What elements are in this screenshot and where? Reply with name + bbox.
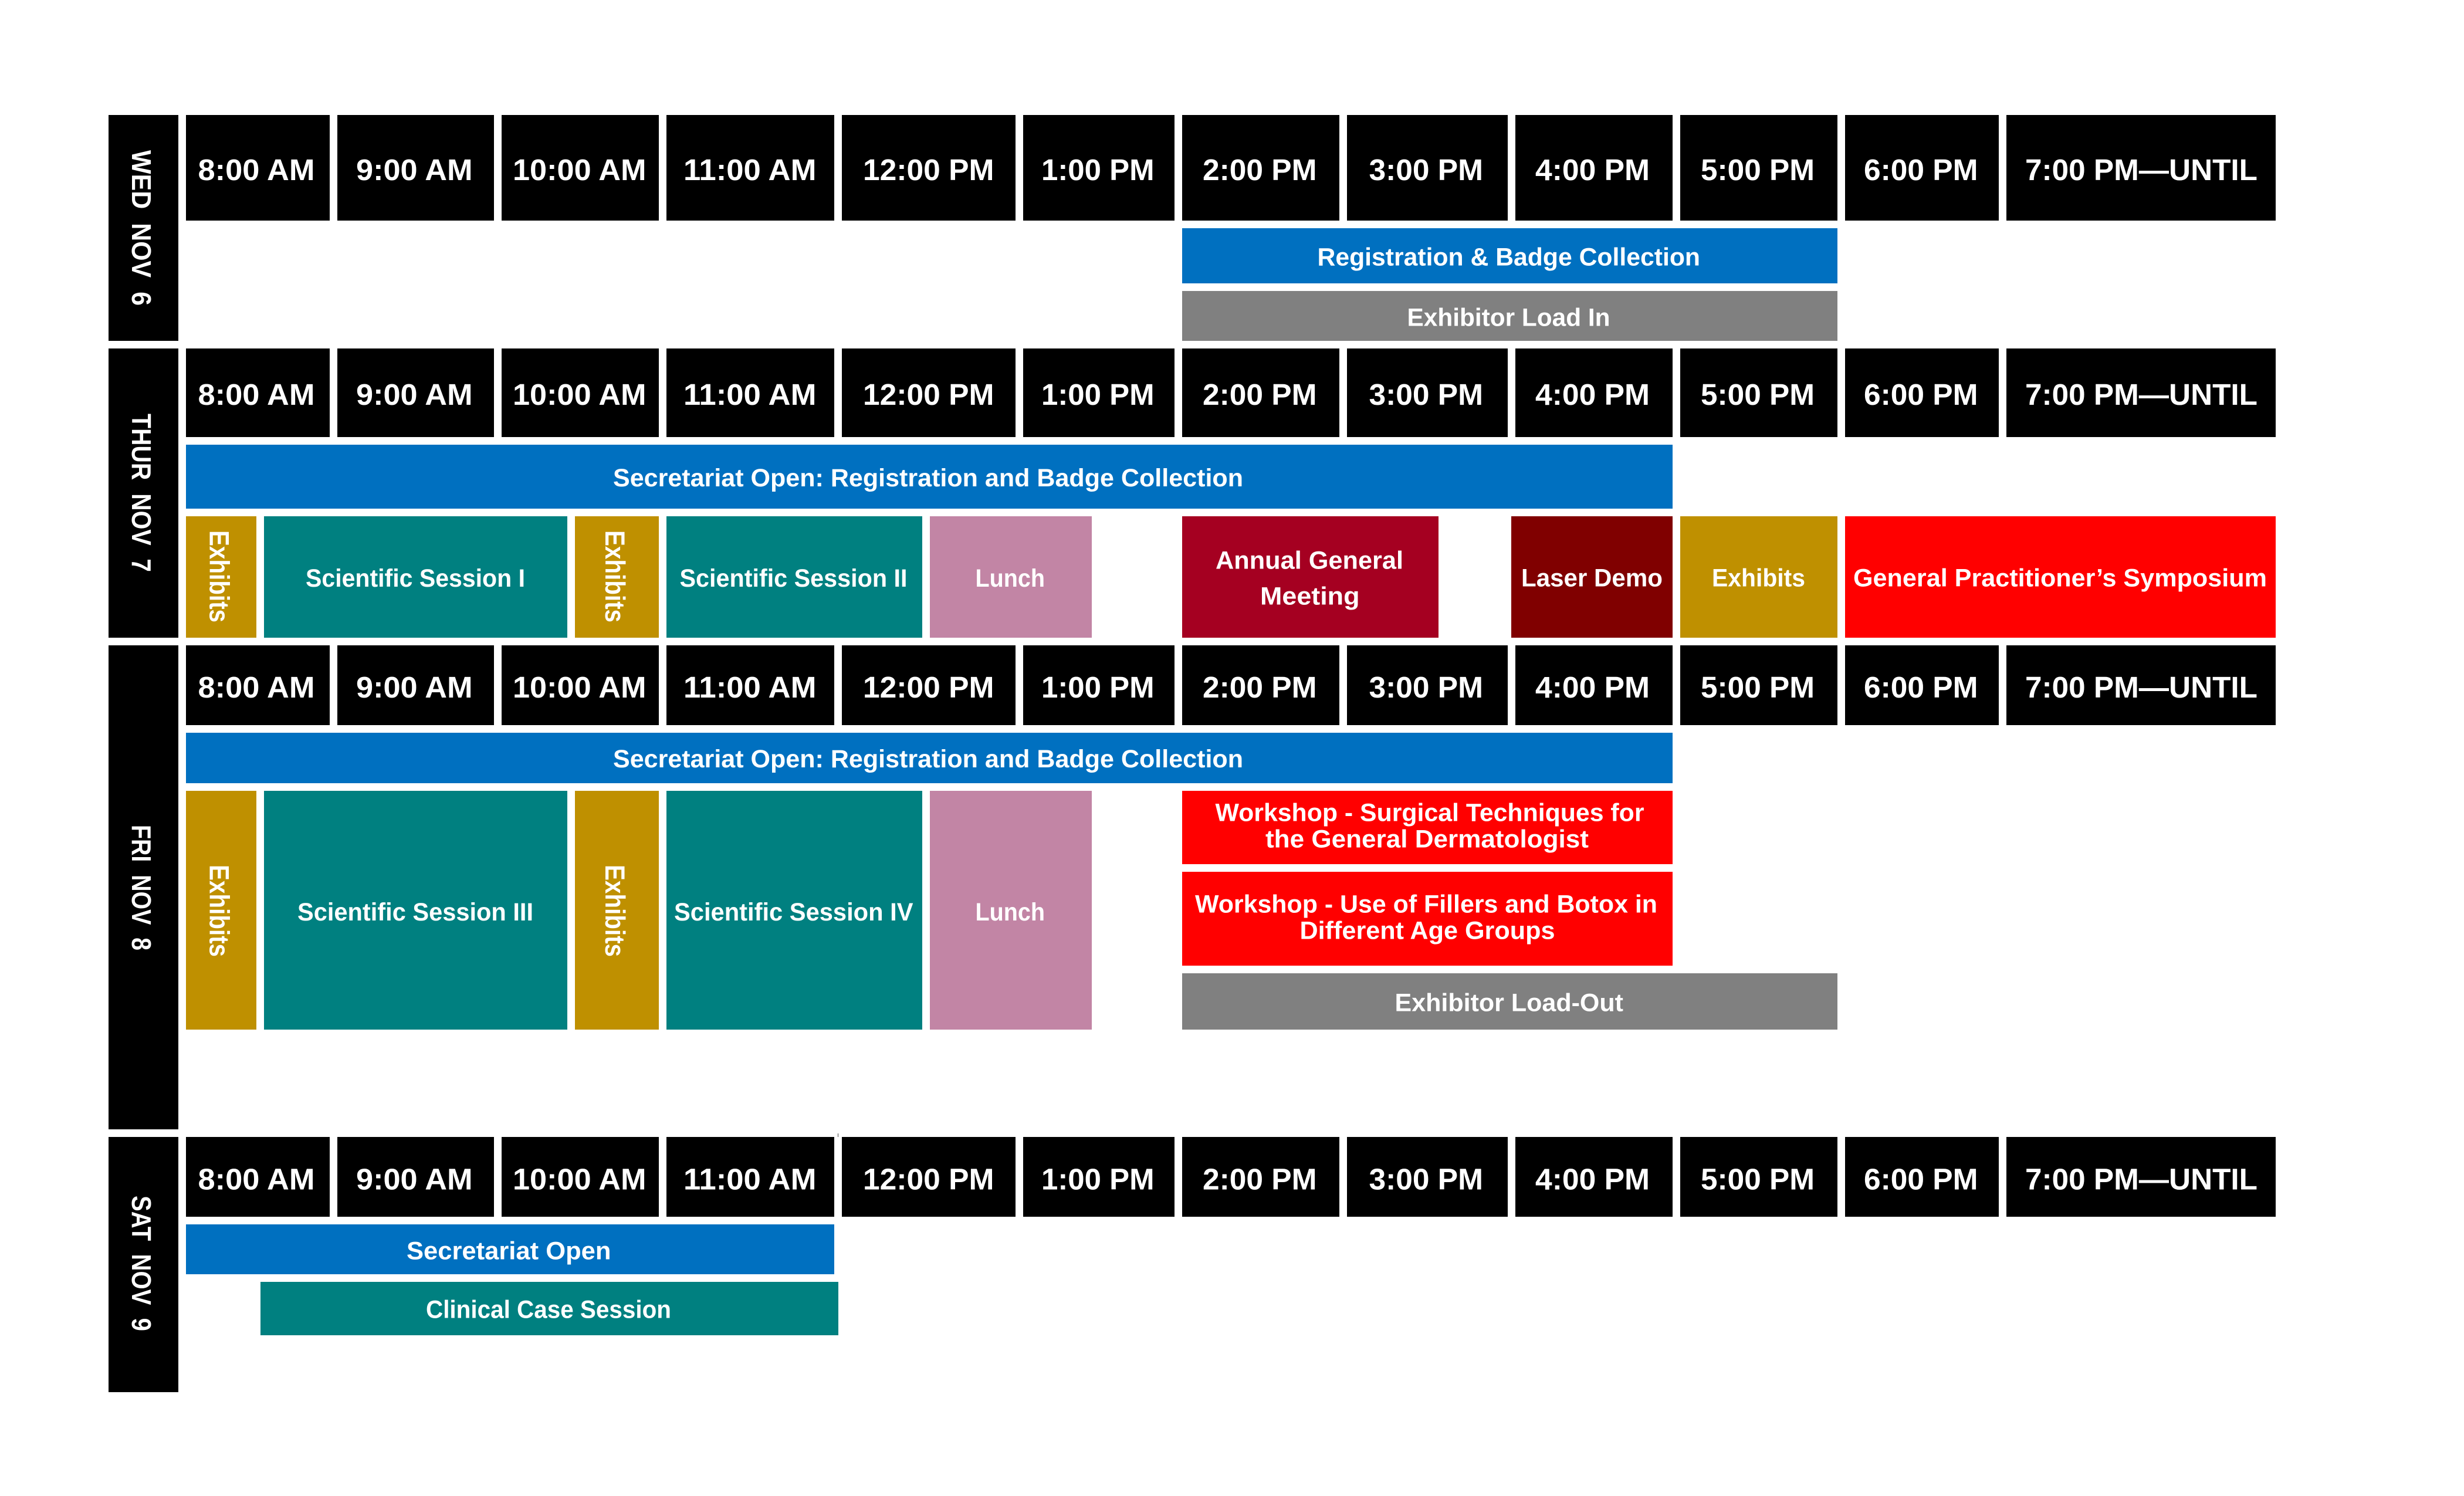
bar: Clinical Case Session: Clinical Case Session <box>426 1295 671 1324</box>
block: Workshop Fillers and Botox: Workshop - Use of Fillers and Botox in <box>1195 891 1657 919</box>
time header row: Wednesday: 5:00 PM <box>1701 153 1815 187</box>
block: Scientific Session I <box>264 516 567 638</box>
time header row: Saturday: 1:00 PM <box>1041 1163 1155 1196</box>
time header row: Friday: 8:00 AM <box>198 671 314 704</box>
time header row: Saturday: 12:00 PM <box>863 1163 994 1196</box>
time header row: Thursday: 9:00 AM <box>356 378 473 411</box>
block: Scientific Session IV: Scientific Session IV <box>674 898 913 926</box>
time header row: Friday: 1:00 PM <box>1041 671 1155 704</box>
time header row: Thursday: 7:00 PM—UNTIL <box>2025 378 2257 411</box>
block: Scientific Session II <box>666 516 922 638</box>
block: Exhibits morning 1 <box>186 516 256 638</box>
time header row: Friday: 2:00 PM <box>1203 671 1316 704</box>
block: Annual General Meeting <box>1182 516 1439 638</box>
time header row: Friday: 7:00 PM—UNTIL <box>2025 671 2257 704</box>
block: Exhibits morning 1: Exhibits <box>204 530 235 622</box>
time header row: Wednesday: 7:00 PM—UNTIL <box>2025 153 2257 187</box>
time header row: Wednesday: 1:00 PM <box>1041 153 1155 187</box>
time header row: Thursday <box>186 348 2276 437</box>
time header row: Friday: 5:00 PM <box>1701 671 1815 704</box>
bar: Secretariat Open Friday: Secretariat Open: Registration and Badge Collection <box>613 745 1243 773</box>
block: Annual General Meeting: Meeting <box>1260 582 1360 610</box>
block: Annual General Meeting: Annual General <box>1216 547 1403 575</box>
block: General Practitioner's Symposium: General Practitioner’s Symposium <box>1853 564 2267 593</box>
time header row: Friday: 11:00 AM <box>683 671 817 704</box>
block: Workshop Fillers and Botox: Different Age Groups <box>1300 916 1555 945</box>
block: Exhibits afternoon: Exhibits <box>1712 564 1805 593</box>
day label: THUR NOV 7: THUR NOV 7 <box>126 414 157 572</box>
block: Workshop Surgical Techniques: Workshop - Surgical Techniques for <box>1216 799 1644 827</box>
block: Lunch Friday: Lunch <box>975 898 1045 926</box>
time header row: Saturday: 6:00 PM <box>1864 1163 1978 1196</box>
bar: Secretariat Open Saturday <box>186 1224 834 1274</box>
block: Workshop Fillers and Botox <box>1182 872 1673 966</box>
bar: Exhibitor Load In: Exhibitor Load In <box>1407 304 1610 332</box>
time header row: Wednesday: 12:00 PM <box>863 153 994 187</box>
block: Lunch Thursday <box>930 516 1092 638</box>
day label: FRI NOV 8 <box>109 645 178 1129</box>
time header row: Wednesday: 6:00 PM <box>1864 153 1978 187</box>
time header row: Wednesday: 9:00 AM <box>356 153 473 187</box>
day label: FRI NOV 8: FRI NOV 8 <box>126 825 157 950</box>
panel: Thursday Nov 7 <box>109 348 2276 638</box>
block: Exhibits Friday 1 <box>186 791 256 1030</box>
time header row: Thursday: 1:00 PM <box>1041 378 1155 411</box>
time header row: Saturday: 8:00 AM <box>198 1163 314 1196</box>
time header row: Wednesday: 4:00 PM <box>1535 153 1650 187</box>
time header row: Thursday: 10:00 AM <box>513 378 647 411</box>
bar: Exhibitor Load In <box>1182 291 1837 341</box>
time header row: Thursday: 8:00 AM <box>198 378 314 411</box>
day label: SAT NOV 9: SAT NOV 9 <box>126 1196 157 1331</box>
time header row: Friday: 4:00 PM <box>1535 671 1650 704</box>
time header row: Thursday: 5:00 PM <box>1701 378 1815 411</box>
day label: WED NOV 6: WED NOV 6 <box>126 150 157 306</box>
bar: Secretariat Open Friday <box>186 733 1673 783</box>
time header row: Saturday: 10:00 AM <box>513 1163 647 1196</box>
block: Scientific Session III: Scientific Session III <box>297 898 533 926</box>
time header row: Thursday: 11:00 AM <box>683 378 817 411</box>
time header row: Thursday: 2:00 PM <box>1203 378 1316 411</box>
time header row: Friday <box>186 645 2276 725</box>
time header row: Saturday: 11:00 AM <box>683 1163 817 1196</box>
panel: Friday Nov 8 <box>109 645 2276 1129</box>
day label: SAT NOV 9 <box>109 1137 178 1392</box>
time header row: Wednesday <box>186 115 2276 221</box>
time header row: Saturday <box>186 1137 2276 1217</box>
block: Scientific Session II: Scientific Session II <box>679 564 907 593</box>
bar: Exhibitor Load-Out <box>1182 973 1837 1030</box>
time header row: Friday: 12:00 PM <box>863 671 994 704</box>
block: Exhibits morning 2 <box>575 516 659 638</box>
block: General Practitioner's Symposium <box>1845 516 2276 638</box>
time header row: Saturday: 4:00 PM <box>1535 1163 1650 1196</box>
block: Exhibits Friday 2: Exhibits <box>600 865 631 957</box>
time header row: Wednesday: 2:00 PM <box>1203 153 1316 187</box>
time header row: Thursday: 6:00 PM <box>1864 378 1978 411</box>
time header row: Wednesday: 3:00 PM <box>1369 153 1483 187</box>
block: Laser Demo <box>1511 516 1673 638</box>
time header row: Wednesday: 10:00 AM <box>513 153 647 187</box>
block: Workshop Surgical Techniques: the General Dermatologist <box>1265 825 1589 853</box>
time header row: Wednesday: 11:00 AM <box>683 153 817 187</box>
time header row: Thursday: 3:00 PM <box>1369 378 1483 411</box>
block: Scientific Session I: Scientific Session I <box>306 564 525 593</box>
time header row: Saturday: 2:00 PM <box>1203 1163 1316 1196</box>
block: Exhibits morning 2: Exhibits <box>600 530 631 622</box>
bar: Secretariat Open Thursday <box>186 445 1673 509</box>
bar: Secretariat Open Saturday: Secretariat Open <box>407 1237 611 1265</box>
block: Lunch Thursday: Lunch <box>975 564 1045 593</box>
time header row: Thursday: 12:00 PM <box>863 378 994 411</box>
bar: Clinical Case Session <box>260 1282 838 1335</box>
panel: Saturday Nov 9 <box>109 1133 2276 1392</box>
bar: Exhibitor Load-Out: Exhibitor Load-Out <box>1395 989 1623 1017</box>
time header row: Saturday: 3:00 PM <box>1369 1163 1483 1196</box>
block: Exhibits afternoon <box>1680 516 1837 638</box>
bar: Registration & Badge Collection <box>1182 228 1837 283</box>
block: Laser Demo: Laser Demo <box>1521 564 1663 593</box>
time header row: Friday: 3:00 PM <box>1369 671 1483 704</box>
block: Scientific Session IV <box>666 791 922 1030</box>
time header row: Friday: 10:00 AM <box>513 671 647 704</box>
bar: Secretariat Open Thursday: Secretariat Open: Registration and Badge Collection <box>613 464 1243 492</box>
day label: WED NOV 6 <box>109 115 178 341</box>
block: Scientific Session III <box>264 791 567 1030</box>
block: Lunch Friday <box>930 791 1092 1030</box>
block: Exhibits Friday 2 <box>575 791 659 1030</box>
block: Workshop Surgical Techniques <box>1182 791 1673 864</box>
time header row: Saturday: 5:00 PM <box>1701 1163 1815 1196</box>
time header row: Wednesday: 8:00 AM <box>198 153 314 187</box>
panel: Wednesday Nov 6 <box>109 115 2276 341</box>
block: Exhibits Friday 1: Exhibits <box>204 865 235 957</box>
day label: THUR NOV 7 <box>109 348 178 638</box>
time header row: Friday: 6:00 PM <box>1864 671 1978 704</box>
time header row: Saturday: 7:00 PM—UNTIL <box>2025 1163 2257 1196</box>
time header row: Thursday: 4:00 PM <box>1535 378 1650 411</box>
time header row: Saturday: 9:00 AM <box>356 1163 473 1196</box>
time header row: Friday: 9:00 AM <box>356 671 473 704</box>
bar: Registration & Badge Collection: Registration & Badge Collection <box>1318 243 1700 271</box>
